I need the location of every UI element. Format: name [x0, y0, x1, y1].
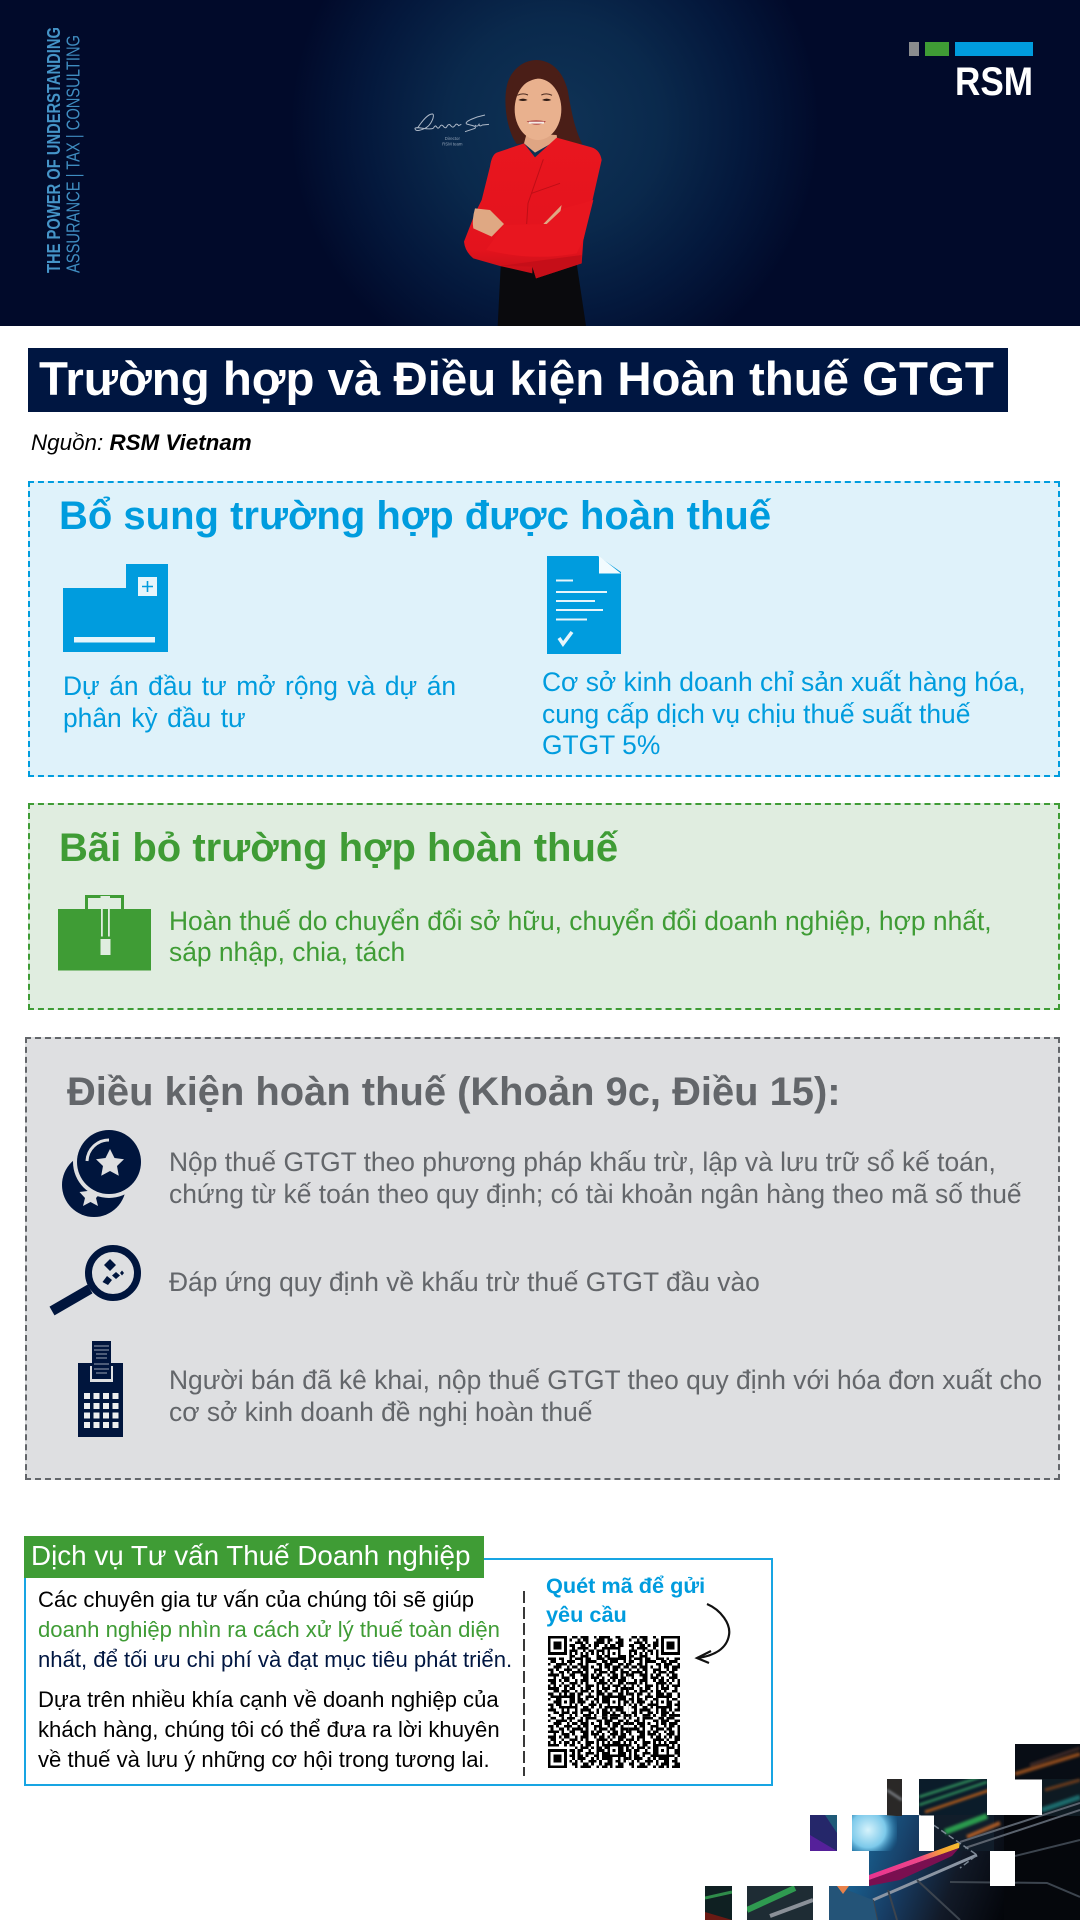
panel: abolished refund cases — [28, 803, 1060, 1010]
text: service description — [38, 1586, 512, 1672]
RSM logo: RSM — [955, 60, 1033, 104]
text: abolished case description: Hoàn thuế do chuyển đổi sở hữu, chuyển đổi doanh nghiệp, hợp nhất, — [169, 906, 992, 936]
panel: tax advisory service — [24, 1558, 773, 1786]
header banner with portrait — [0, 0, 1080, 326]
heading: conditions: Điều kiện hoàn thuế (Khoản 9c, Điều 15): — [67, 1070, 841, 1114]
text: expansion projects — [63, 671, 456, 732]
text: condition 3: cơ sở kinh doanh đề nghị hoàn thuế — [169, 1397, 592, 1427]
text: 5 percent goods and services: cung cấp dịch vụ chịu thuế suất thuế — [542, 698, 970, 728]
text: abolished case description: sáp nhập, chia, tách — [169, 937, 405, 967]
icon: document — [547, 556, 621, 654]
text: 5 percent goods and services: Cơ sở kinh doanh chỉ sản xuất hàng hóa, — [542, 667, 1026, 697]
source line: Nguồn: RSM Vietnam — [31, 430, 252, 455]
text: condition 3: Người bán đã kê khai, nộp thuế GTGT theo quy định với hóa đơn xuất cho — [169, 1365, 1042, 1395]
arrow to QR code — [694, 1603, 730, 1664]
panel: refund conditions — [25, 1037, 1060, 1480]
heading: additional cases: Bổ sung trường hợp được hoàn thuế — [59, 494, 771, 538]
text: scan prompt: Quét mã để gửi — [546, 1572, 705, 1598]
text: service description: nhất, để tối ưu chi phí và đạt mục tiêu phát triển. — [38, 1646, 512, 1672]
heading tab: service: Dịch vụ Tư vấn Thuế Doanh nghiệp — [31, 1540, 470, 1571]
signature — [415, 114, 489, 147]
text: service description 2: khách hàng, chúng tôi có thể đưa ra lời khuyên — [38, 1717, 500, 1742]
icon: magnifier — [50, 1245, 141, 1316]
text: condition 2: Đáp ứng quy định về khấu trừ thuế GTGT đầu vào — [169, 1267, 760, 1297]
text: scan prompt — [546, 1572, 705, 1626]
title: Trường hợp và Điều kiện Hoàn thuế GTGT — [39, 353, 994, 406]
tagline vertical text — [44, 27, 84, 273]
QR code — [548, 1636, 680, 1768]
icon: briefcase — [58, 895, 151, 970]
text: service description 2: Dựa trên nhiều khía cạnh về doanh nghiệp của — [38, 1687, 499, 1712]
text: condition 1: chứng từ kế toán theo quy định; có tài khoản ngân hàng theo mã số thuế — [169, 1179, 1022, 1209]
icon: folder — [63, 564, 168, 652]
signature: Director — [445, 136, 460, 141]
text: condition 3 — [169, 1365, 1042, 1427]
text: scan prompt: yêu cầu — [546, 1602, 627, 1626]
text: abolished case description — [169, 906, 992, 967]
portrait — [464, 60, 602, 326]
icon: calculator — [78, 1341, 123, 1437]
text: service description 2 — [38, 1687, 500, 1772]
text: service description: doanh nghiệp nhìn ra cách xử lý thuế toàn diện — [38, 1616, 500, 1642]
text: expansion projects: Dự án đầu tư mở rộng và dự án — [63, 671, 456, 701]
RSM logo — [909, 42, 1033, 104]
heading: abolished cases: Bãi bỏ trường hợp hoàn thuế — [59, 826, 618, 870]
text: service description 2: về thuế và lưu ý những cơ hội trong tương lai. — [38, 1747, 490, 1772]
signature: RSM team — [442, 142, 463, 147]
text: 5 percent goods and services — [542, 667, 1026, 760]
text: expansion projects: phân kỳ đầu tư — [63, 702, 246, 732]
text: service description: Các chuyên gia tư vấn của chúng tôi sẽ giúp — [38, 1586, 474, 1612]
text: 5 percent goods and services: GTGT 5% — [542, 730, 660, 760]
icon: coins — [62, 1130, 141, 1217]
panel: additional refund cases — [28, 481, 1060, 777]
divider: dashed — [523, 1591, 525, 1776]
text: condition 1 — [169, 1147, 1022, 1209]
decorative technology mosaic — [705, 1744, 1080, 1920]
text: condition 1: Nộp thuế GTGT theo phương pháp khấu trừ, lập và lưu trữ sổ kế toán, — [169, 1147, 996, 1177]
